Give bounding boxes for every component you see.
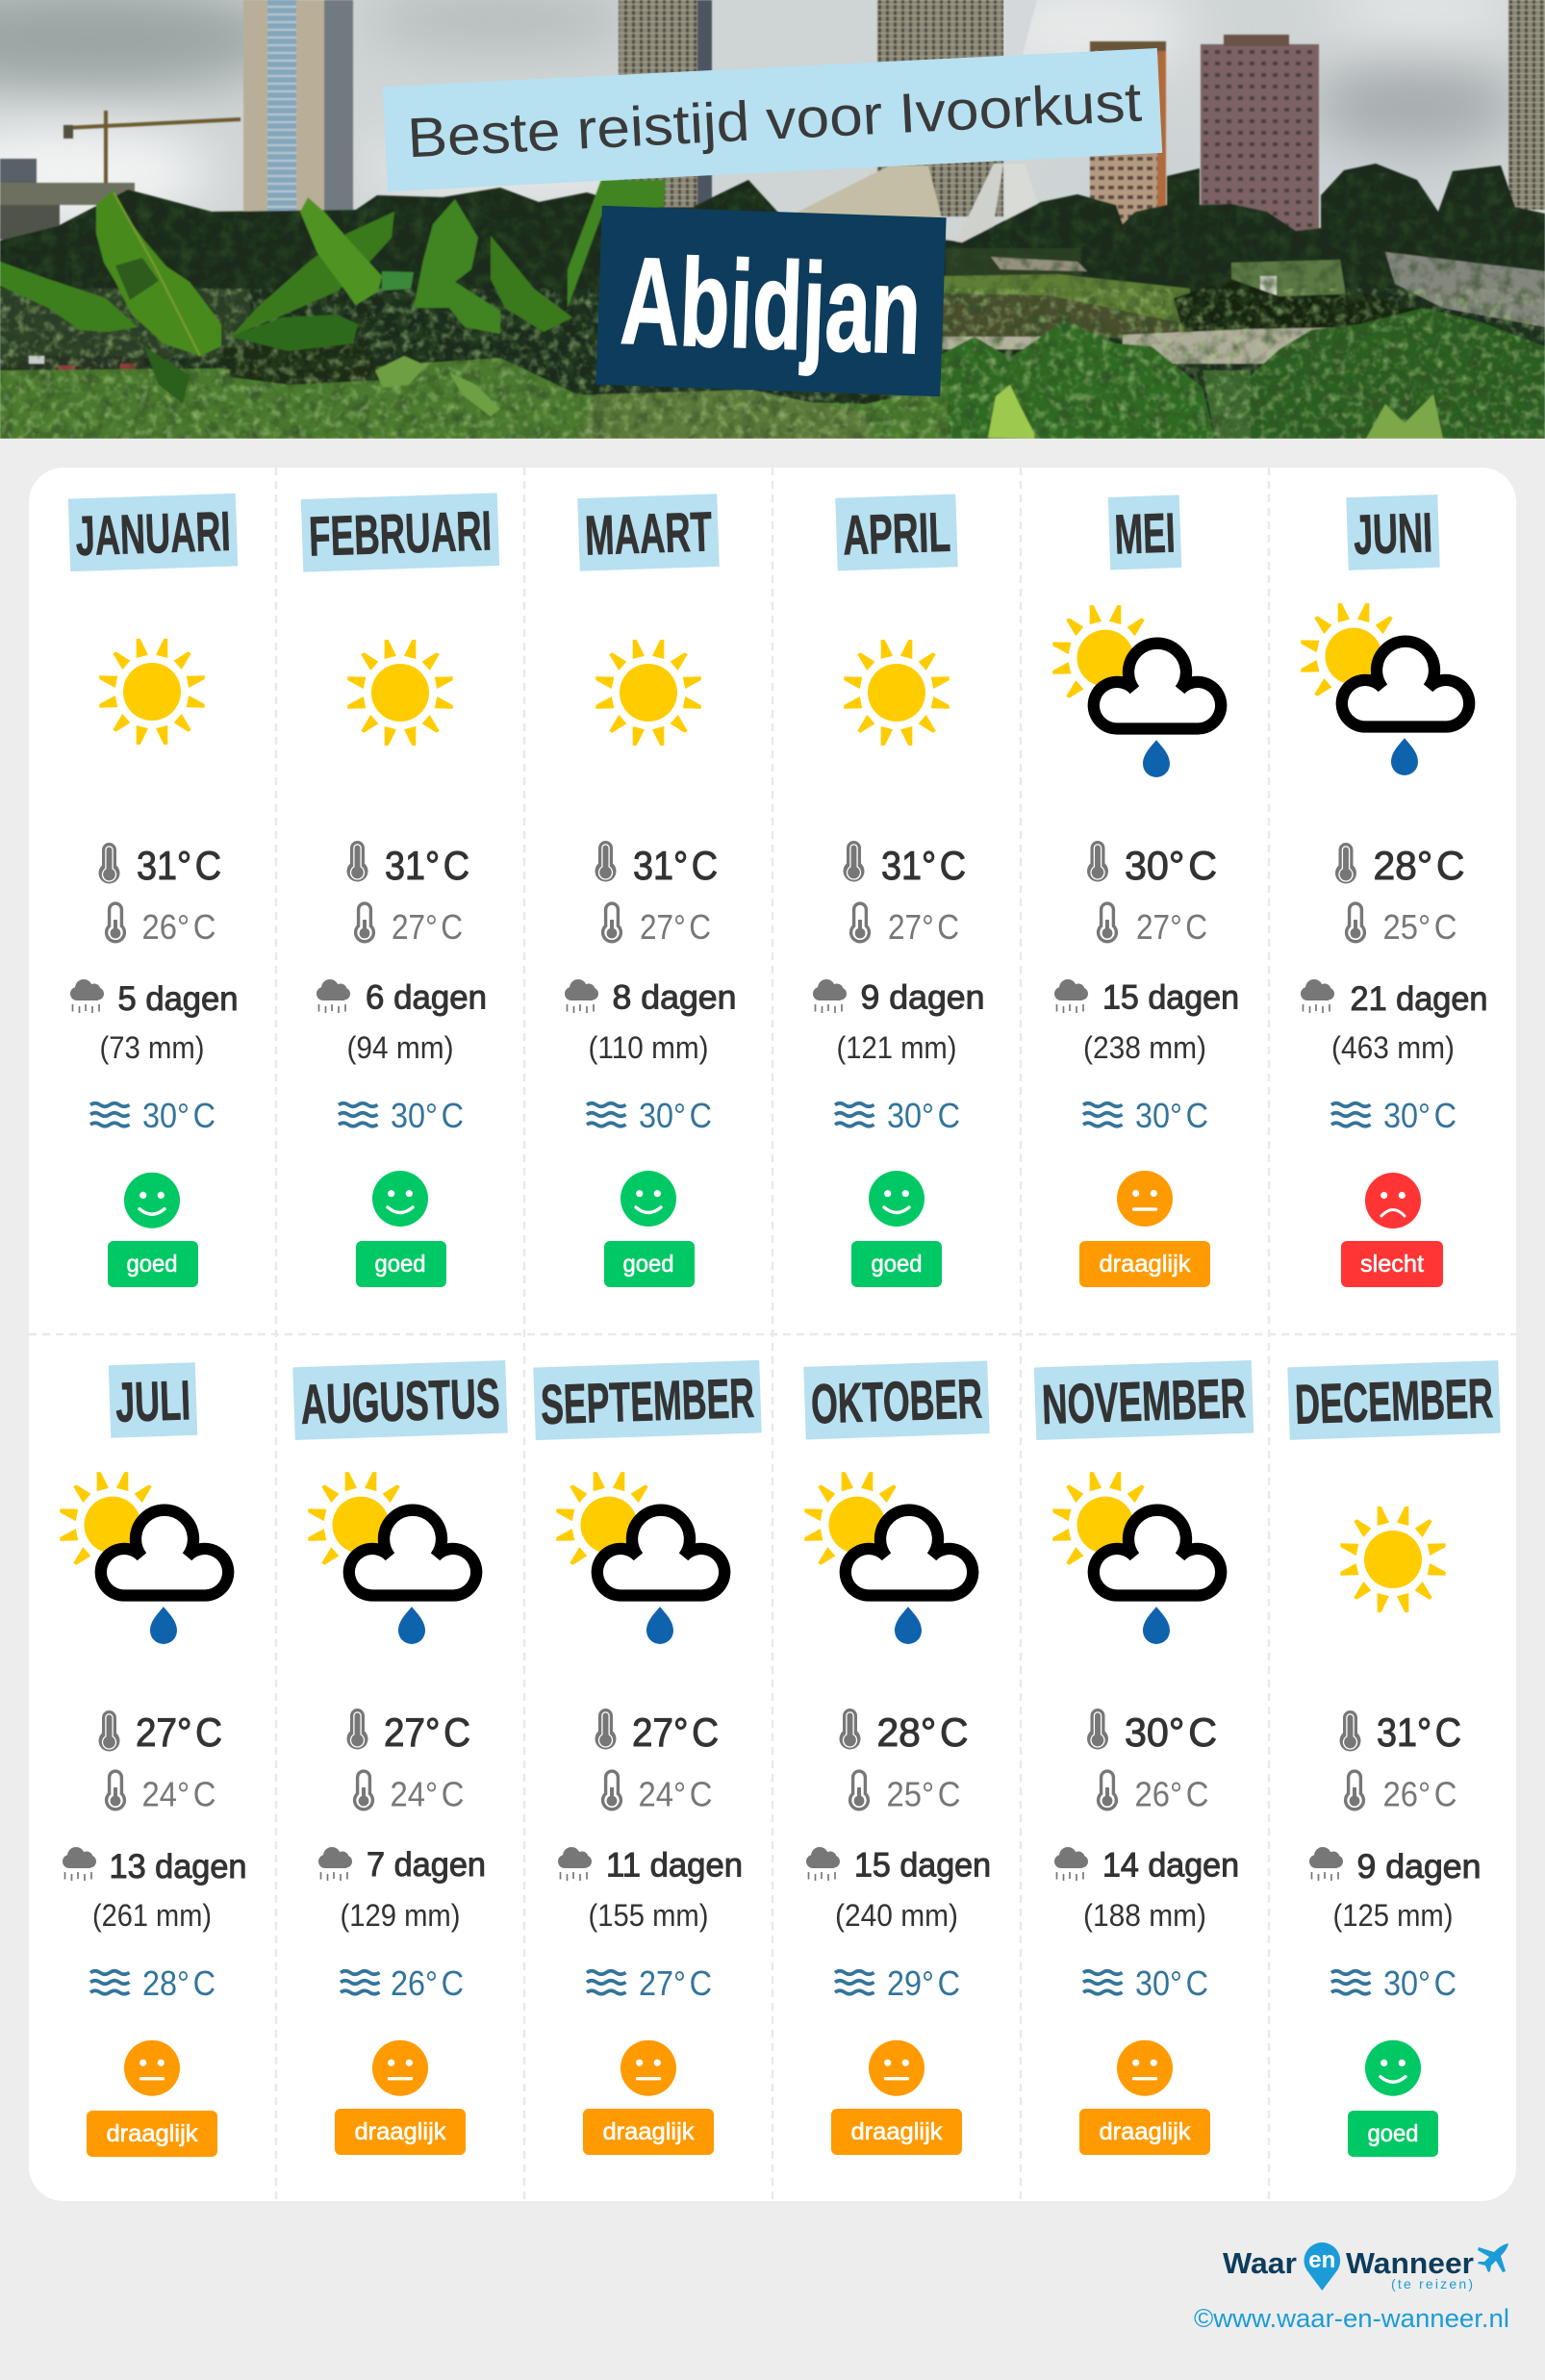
rainfall: (73 mm) xyxy=(100,1030,204,1065)
rain days: 8 dagen xyxy=(612,979,737,1016)
high temperature: 31°C xyxy=(385,843,469,888)
title band: Beste reistijd voor Ivoorkust xyxy=(406,70,1143,169)
icon: good face xyxy=(372,1171,428,1227)
icon: average face xyxy=(869,2040,924,2096)
rainfall: (94 mm) xyxy=(346,1030,454,1065)
rainfall: (110 mm) xyxy=(589,1030,708,1065)
icon: rain cloud xyxy=(1054,1847,1088,1881)
high temperature: 30°C xyxy=(1125,1709,1217,1755)
rating badge xyxy=(583,2109,714,2155)
icon: low temperature thermometer xyxy=(107,903,124,942)
icon: map pin with en: en xyxy=(1308,2247,1335,2273)
month label: FEBRUARI xyxy=(308,499,493,569)
month label: JULI xyxy=(114,1369,191,1434)
icon: average face xyxy=(124,2040,180,2096)
icon: good face xyxy=(869,1171,924,1227)
rating badge xyxy=(851,1241,942,1287)
water temperature: 28°C xyxy=(142,1963,215,2003)
logo word: Waar: Waar xyxy=(1223,2246,1297,2280)
high temperature: 31°C xyxy=(1377,1709,1461,1755)
icon: sun xyxy=(347,640,453,746)
month label: APRIL xyxy=(842,501,951,567)
rain days: 21 dagen xyxy=(1351,980,1487,1018)
panel: december xyxy=(1287,1360,1501,2157)
icon: high temperature thermometer xyxy=(595,841,616,882)
icon: high temperature thermometer xyxy=(346,841,367,882)
rating badge: goed xyxy=(1368,2120,1418,2147)
rainfall: (261 mm) xyxy=(92,1898,212,1933)
rain days: 5 dagen xyxy=(117,980,239,1018)
city name band: Abidjan xyxy=(619,232,924,380)
low temperature: 25°C xyxy=(887,1774,960,1814)
icon: sun behind cloud with rain drop xyxy=(1301,603,1469,775)
high temperature: 31°C xyxy=(633,843,718,888)
city name band xyxy=(595,206,947,396)
icon: good face xyxy=(124,1173,180,1228)
icon: sun behind cloud with rain drop xyxy=(60,1472,228,1644)
water temperature: 30°C xyxy=(1383,1963,1456,2003)
icon: high temperature thermometer xyxy=(1339,1710,1360,1752)
low temperature: 26°C xyxy=(1383,1774,1456,1814)
icon: water waves xyxy=(587,1971,625,1994)
month label xyxy=(803,1361,990,1439)
rainfall: (238 mm) xyxy=(1083,1030,1206,1065)
rain days: 15 dagen xyxy=(1102,979,1239,1016)
month label xyxy=(1108,494,1181,570)
water temperature: 30°C xyxy=(1135,1963,1208,2003)
icon: rain cloud xyxy=(63,1847,96,1881)
icon: average face xyxy=(372,2040,428,2096)
panel: augustus xyxy=(292,1360,508,2155)
icon: high temperature thermometer xyxy=(346,1709,367,1750)
icon: rain cloud xyxy=(806,1847,840,1881)
panel: juni xyxy=(1301,494,1487,1287)
month label xyxy=(533,1360,762,1440)
water temperature: 27°C xyxy=(639,1963,712,2003)
icon: high temperature thermometer xyxy=(1087,841,1108,882)
icon: good face xyxy=(621,1171,676,1227)
rain days: 9 dagen xyxy=(1356,1848,1482,1886)
high temperature: 27°C xyxy=(384,1709,470,1755)
icon: average face xyxy=(1117,2040,1173,2096)
grass xyxy=(0,358,948,439)
low temperature: 27°C xyxy=(1136,907,1207,947)
rating badge xyxy=(1348,2111,1438,2157)
icon: low temperature thermometer xyxy=(603,903,621,942)
water temperature: 30°C xyxy=(142,1096,215,1135)
rating badge: draaglijk xyxy=(850,2118,943,2145)
water temperature: 30°C xyxy=(1135,1096,1208,1135)
month label xyxy=(1346,494,1440,570)
rating badge xyxy=(604,1241,695,1287)
icon: low temperature thermometer xyxy=(1347,903,1364,942)
icon: average face xyxy=(621,2040,676,2096)
icon: rain cloud xyxy=(558,1847,592,1881)
water temperature: 26°C xyxy=(391,1963,464,2003)
icon: sun behind cloud with rain drop xyxy=(1052,1472,1221,1644)
low temperature: 25°C xyxy=(1383,907,1456,947)
rating badge xyxy=(1079,2109,1210,2155)
rainfall: (125 mm) xyxy=(1333,1898,1453,1933)
icon: sun xyxy=(1340,1506,1446,1612)
copyright url: ©www.waar-en-wanneer.nl xyxy=(1194,2304,1509,2333)
low temperature: 26°C xyxy=(1135,1774,1208,1814)
month label: OKTOBER xyxy=(810,1368,983,1435)
icon: low temperature thermometer xyxy=(1346,1771,1363,1810)
rating badge xyxy=(1341,1241,1443,1287)
panel: september xyxy=(533,1360,762,2155)
icon: high temperature thermometer xyxy=(1335,843,1356,884)
icon: sun behind cloud with rain drop xyxy=(804,1472,973,1644)
water temperature: 30°C xyxy=(887,1096,960,1135)
month label: AUGUSTUS xyxy=(300,1367,501,1436)
icon: low temperature thermometer xyxy=(356,903,373,942)
month label xyxy=(577,494,720,571)
rainfall: (188 mm) xyxy=(1083,1898,1206,1933)
low temperature: 26°C xyxy=(142,907,215,947)
rating badge: goed xyxy=(623,1251,673,1278)
rating badge xyxy=(108,1241,198,1287)
icon: low temperature thermometer xyxy=(850,1771,868,1810)
icon: rain cloud xyxy=(1301,979,1334,1013)
rain days: 9 dagen xyxy=(860,979,985,1016)
month label: MAART xyxy=(584,500,713,568)
icon: high temperature thermometer xyxy=(595,1709,616,1750)
icon: rain cloud xyxy=(318,1847,352,1881)
icon: low temperature thermometer xyxy=(603,1771,621,1810)
icon: water waves xyxy=(835,1971,874,1994)
icon: sun xyxy=(844,640,950,746)
low temperature: 27°C xyxy=(888,907,959,947)
month label xyxy=(68,494,238,571)
rain days: 14 dagen xyxy=(1102,1847,1239,1884)
rating badge xyxy=(335,2109,466,2155)
rating badge: draaglijk xyxy=(1099,2118,1191,2145)
panel: oktober xyxy=(803,1361,991,2155)
panel: maart xyxy=(565,494,737,1287)
panel: april xyxy=(813,494,985,1287)
icon: good face xyxy=(1365,2040,1421,2096)
month label: SEPTEMBER xyxy=(540,1367,755,1436)
month label: JANUARI xyxy=(75,500,232,568)
icon: bad face xyxy=(1365,1173,1421,1228)
icon: sun behind cloud with rain drop xyxy=(308,1472,476,1644)
icon: rain cloud xyxy=(317,979,350,1013)
panel: februari xyxy=(301,493,499,1287)
month label: JUNI xyxy=(1353,501,1433,567)
icon: rain cloud xyxy=(1309,1847,1343,1881)
rain days: 6 dagen xyxy=(366,979,487,1016)
panel: juli xyxy=(60,1362,246,2157)
rainfall: (463 mm) xyxy=(1331,1030,1455,1065)
logo: Waar en Wanneer xyxy=(1223,2242,1508,2291)
panel: mei xyxy=(1052,494,1239,1287)
low temperature: 27°C xyxy=(392,907,463,947)
foreground bushes xyxy=(938,320,1215,439)
icon: average face xyxy=(1117,1171,1173,1227)
icon: sun behind cloud with rain drop xyxy=(1052,605,1221,777)
header photo: Abidjan skyline with banana plants xyxy=(0,0,1545,439)
icon: airplane xyxy=(1478,2243,1508,2272)
icon: water waves xyxy=(1331,1971,1370,1994)
icon: high temperature thermometer xyxy=(1087,1709,1108,1750)
rating badge: draaglijk xyxy=(106,2120,198,2147)
month label: MEI xyxy=(1113,501,1177,567)
icon: water waves xyxy=(1083,1103,1122,1127)
month label xyxy=(835,494,958,570)
icon: rain cloud xyxy=(565,979,598,1013)
icon: high temperature thermometer xyxy=(839,1709,860,1750)
background trees xyxy=(0,164,1545,439)
icon: high temperature thermometer xyxy=(98,843,119,884)
rain days: 15 dagen xyxy=(854,1847,991,1884)
rating badge xyxy=(1079,1241,1210,1287)
rainfall: (129 mm) xyxy=(341,1898,460,1933)
rating badge xyxy=(356,1241,446,1287)
rain days: 7 dagen xyxy=(367,1846,486,1884)
rainfall: (121 mm) xyxy=(837,1030,956,1065)
month label: NOVEMBER xyxy=(1041,1367,1247,1436)
low temperature: 24°C xyxy=(142,1774,215,1814)
month label xyxy=(109,1362,197,1438)
rainfall: (155 mm) xyxy=(589,1898,708,1933)
month label xyxy=(1034,1360,1254,1440)
rain days: 11 dagen xyxy=(606,1847,743,1884)
rating badge: goed xyxy=(375,1251,425,1278)
rating badge: slecht xyxy=(1360,1251,1424,1278)
icon: water waves xyxy=(835,1103,874,1127)
rating badge xyxy=(87,2111,217,2157)
month label xyxy=(301,493,499,572)
high temperature: 31°C xyxy=(881,843,966,888)
logo tagline: (te reizen) xyxy=(1391,2276,1473,2291)
icon: low temperature thermometer xyxy=(1099,1771,1116,1810)
icon: sun xyxy=(99,639,205,745)
high temperature: 27°C xyxy=(632,1709,719,1755)
rating badge: goed xyxy=(127,1251,177,1278)
water temperature: 30°C xyxy=(1383,1096,1456,1135)
water temperature: 29°C xyxy=(887,1963,960,2003)
icon: water waves xyxy=(1083,1971,1122,1994)
icon: water waves xyxy=(90,1103,129,1127)
low temperature: 24°C xyxy=(639,1774,712,1814)
rating badge: draaglijk xyxy=(354,2118,446,2145)
panel: november xyxy=(1034,1360,1254,2155)
icon: low temperature thermometer xyxy=(107,1771,124,1810)
rating badge xyxy=(831,2109,962,2155)
high temperature: 30°C xyxy=(1125,843,1217,888)
title band xyxy=(383,48,1162,191)
rating badge: draaglijk xyxy=(602,2118,695,2145)
icon: sun behind cloud with rain drop xyxy=(556,1472,724,1644)
water temperature: 30°C xyxy=(391,1096,464,1135)
rating badge: goed xyxy=(872,1251,922,1278)
high temperature: 28°C xyxy=(877,1709,968,1755)
logo word: Wanneer: Wanneer xyxy=(1346,2246,1474,2280)
water temperature: 30°C xyxy=(639,1096,712,1135)
icon: low temperature thermometer xyxy=(355,1771,372,1810)
banana leaves xyxy=(0,262,138,332)
icon: map pin with en xyxy=(1304,2242,1340,2291)
high temperature: 28°C xyxy=(1374,843,1464,888)
low temperature: 27°C xyxy=(640,907,711,947)
icon: water waves xyxy=(1331,1103,1370,1127)
rain days: 13 dagen xyxy=(110,1848,246,1886)
rating badge: draaglijk xyxy=(1099,1251,1191,1278)
icon: rain cloud xyxy=(813,979,847,1013)
high temperature: 27°C xyxy=(136,1709,222,1755)
icon: low temperature thermometer xyxy=(1099,903,1116,942)
icon: low temperature thermometer xyxy=(851,903,869,942)
icon: water waves xyxy=(341,1971,379,1994)
icon: sun xyxy=(595,640,701,746)
icon: water waves xyxy=(587,1103,625,1127)
icon: water waves xyxy=(339,1103,377,1127)
icon: rain cloud xyxy=(70,979,104,1013)
icon: high temperature thermometer xyxy=(98,1710,119,1752)
white calendar card xyxy=(29,468,1516,2201)
low temperature: 24°C xyxy=(391,1774,464,1814)
month label xyxy=(292,1360,508,1440)
panel: januari xyxy=(68,494,239,1287)
rainfall: (240 mm) xyxy=(835,1898,958,1933)
high temperature: 31°C xyxy=(137,843,221,888)
icon: high temperature thermometer xyxy=(843,841,864,882)
icon: rain cloud xyxy=(1054,979,1088,1013)
icon: water waves xyxy=(90,1971,129,1994)
